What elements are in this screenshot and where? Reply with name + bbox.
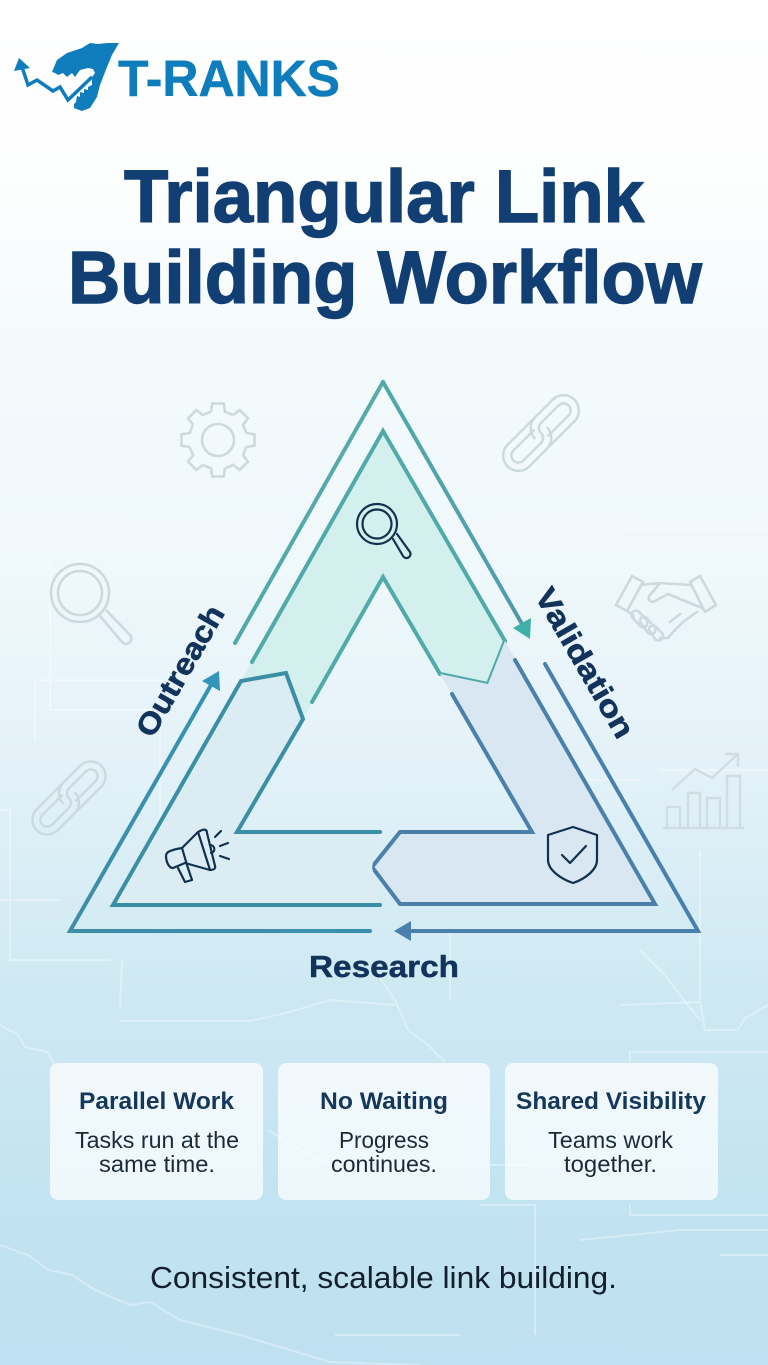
card: Parallel Work: Parallel Work — [79, 1088, 234, 1115]
card: No Waiting — [278, 1063, 490, 1200]
card: Shared Visibility: together. — [564, 1151, 657, 1177]
card: No Waiting: Progress — [339, 1127, 429, 1153]
icon: ghost chain link upper right — [497, 389, 585, 477]
footer tagline: Consistent, scalable link building. — [150, 1260, 617, 1295]
card: No Waiting: continues. — [331, 1151, 437, 1177]
title: Triangular Link — [124, 155, 645, 238]
panel: research segment (top, teal) — [241, 431, 505, 719]
arrow: outer top to validation — [235, 382, 531, 643]
icon: ghost magnifier — [51, 564, 131, 644]
logo icon: dinosaur head with rising arrow — [14, 43, 119, 111]
label: Validation: Validation — [528, 582, 641, 744]
icon: shield with check — [548, 827, 597, 883]
icon: ghost handshake — [616, 576, 716, 641]
icon: ghost bar chart with arrow — [663, 754, 744, 828]
card: Parallel Work — [50, 1063, 263, 1200]
label: Outreach: Outreach — [130, 600, 232, 743]
icon: megaphone — [166, 830, 229, 882]
title — [68, 155, 702, 319]
logo: T-RANKS — [14, 43, 340, 111]
arrow: outer left to outreach — [70, 671, 370, 931]
card: No Waiting: No Waiting — [320, 1088, 448, 1115]
arrow: outer right to research — [394, 664, 698, 941]
card: Parallel Work: same time. — [99, 1151, 215, 1177]
background circuit and jagged lines — [0, 530, 768, 1365]
card: Shared Visibility: Shared Visibility — [516, 1088, 706, 1115]
icon: magnifier — [357, 504, 411, 558]
panel: outreach segment (left, teal-blue) — [113, 673, 380, 905]
logo: T-RANKS: T-RANKS — [118, 50, 340, 107]
title: Building Workflow — [68, 236, 702, 319]
panel: validation segment (right, blue) — [372, 641, 655, 904]
label: Research: Research — [309, 949, 459, 984]
card: Parallel Work: Tasks run at the — [75, 1127, 239, 1153]
card: Shared Visibility: Teams work — [548, 1127, 673, 1153]
card: Shared Visibility — [505, 1063, 718, 1200]
icon: ghost chain link left — [26, 755, 112, 841]
icon: ghost gear — [182, 404, 254, 476]
